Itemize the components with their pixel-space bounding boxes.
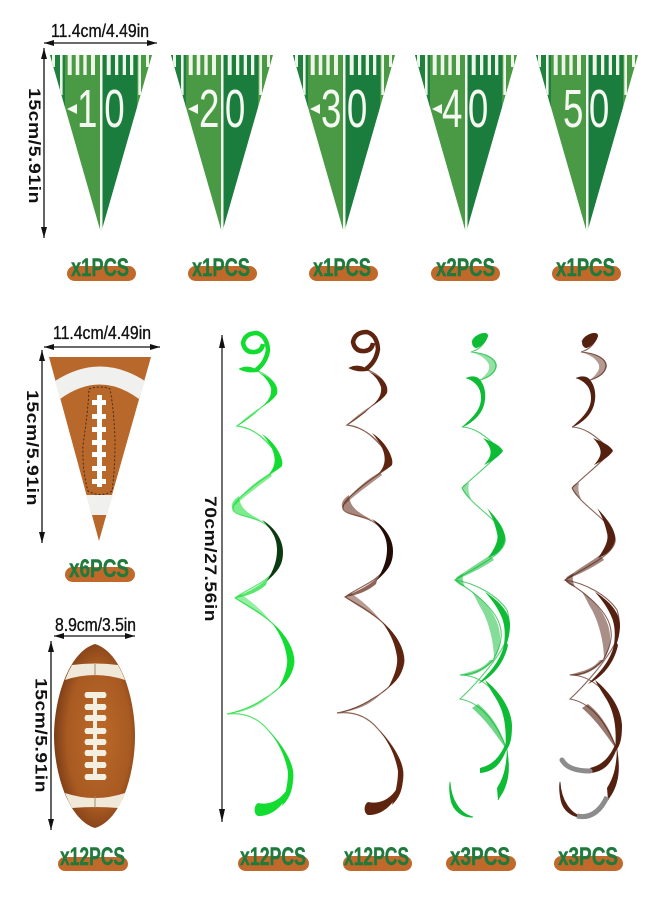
width dimension: football pennant: 11.4cm/4.49in	[53, 323, 151, 343]
pennant 50: 50	[563, 78, 609, 139]
height dimension: green pennant: 15cm/5.91in	[25, 88, 44, 204]
quantity label: football: x12PCS	[60, 843, 125, 871]
width dimension: football: 8.9cm/3.5in	[55, 615, 136, 635]
pennant 10: 10	[77, 78, 125, 139]
height dimension: swirls	[201, 335, 225, 822]
quantity label 10: x1PCS	[71, 254, 129, 282]
football pennant	[49, 357, 151, 541]
quantity label: double brown: x3PCS	[558, 843, 618, 871]
height dimension: football: 15cm/5.91in	[32, 678, 50, 793]
swirl: long brown	[337, 332, 404, 815]
width dimension: football pennant	[44, 323, 160, 350]
height dimension: football pennant	[23, 350, 45, 543]
quantity label: pennant: x6PCS	[69, 555, 129, 583]
quantity label: long green: x12PCS	[240, 843, 306, 871]
pennant 50	[536, 55, 638, 233]
width dimension: green pennant: 11.4cm/4.49in	[51, 21, 149, 41]
pennant 30	[293, 55, 395, 233]
pennant 40	[415, 55, 517, 233]
quantity label 30: x1PCS	[313, 254, 371, 282]
swirl: long green	[227, 333, 294, 816]
swirl: double green	[450, 333, 512, 817]
quantity label: double green: x3PCS	[450, 843, 510, 871]
football	[54, 644, 135, 828]
swirl: double brown	[560, 333, 622, 817]
quantity label 50: x1PCS	[556, 254, 615, 282]
height dimension: football pennant: 15cm/5.91in	[23, 390, 42, 506]
quantity label 20: x1PCS	[192, 254, 250, 282]
pennant 20: 20	[199, 78, 245, 139]
height dimension: football	[32, 641, 54, 830]
height dimension: swirls: 70cm/27.56in	[201, 496, 220, 622]
pennant 10	[50, 55, 152, 233]
pennant 40: 40	[442, 78, 488, 139]
height dimension: green pennant	[25, 48, 47, 238]
quantity label 40: x2PCS	[436, 254, 495, 282]
pennant 30: 30	[321, 78, 367, 139]
quantity label: long brown: x12PCS	[344, 843, 409, 871]
pennant 20	[171, 55, 273, 233]
